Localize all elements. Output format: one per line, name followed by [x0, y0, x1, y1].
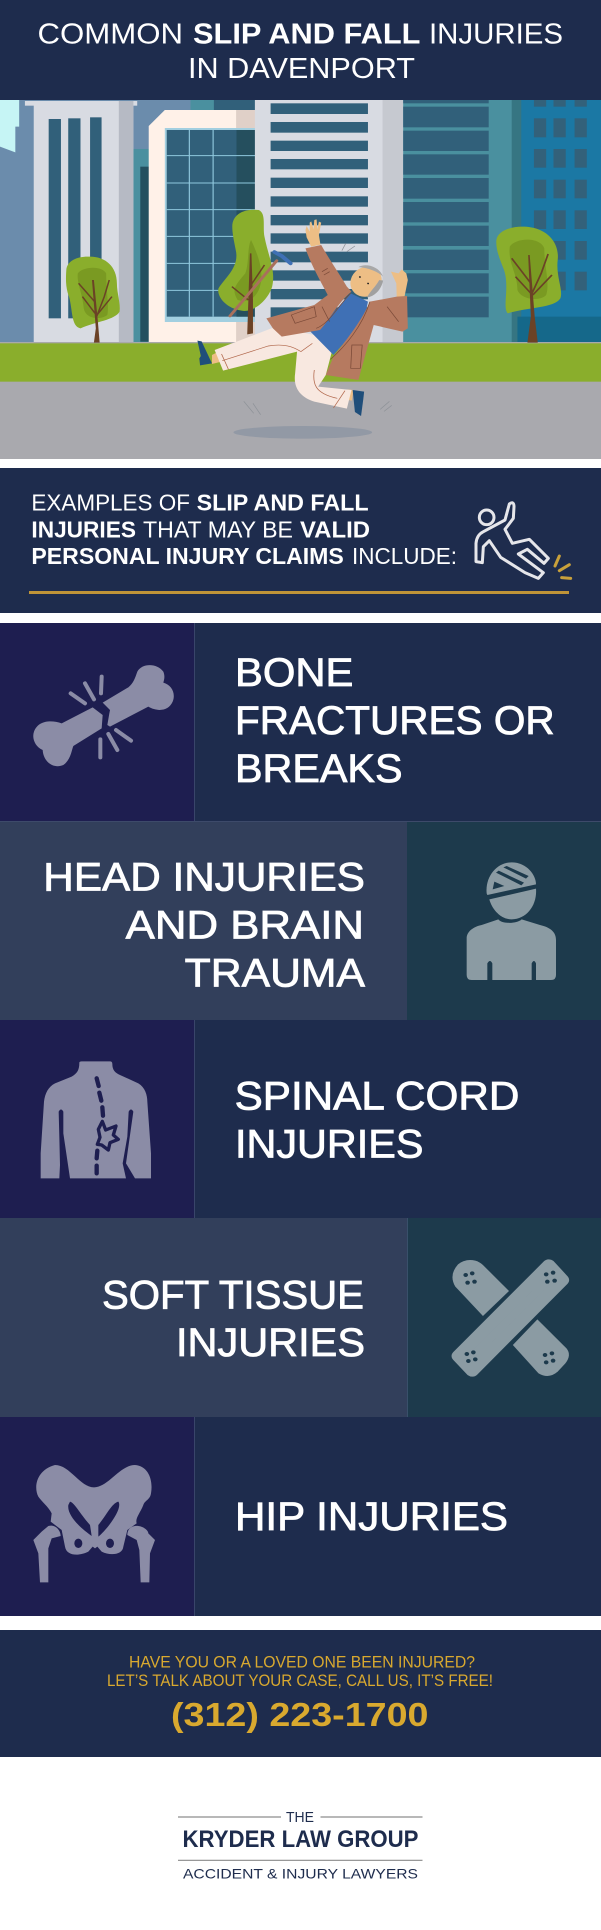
- call to action text: LET’S TALK ABOUT YOUR CASE, CALL US, IT’S FREE!: [107, 1671, 493, 1690]
- phone number: (312) 223-1700: [171, 1697, 428, 1734]
- heading: head injuries and brain trauma: AND BRAIN: [126, 904, 364, 948]
- row: soft tissue: [0, 1218, 601, 1417]
- intro text: SLIP AND FALL: [197, 490, 369, 516]
- icon: person slipping: [476, 503, 571, 578]
- call to action text: [107, 1652, 493, 1690]
- logo: The Kryder Law Group: THE: [286, 1810, 314, 1826]
- heading: soft tissue injuries: [102, 1273, 365, 1365]
- title banner: COMMON: [38, 18, 183, 50]
- call to action panel: [0, 1630, 601, 1757]
- intro text: EXAMPLES OF: [31, 490, 190, 516]
- icon: bandaged head: [467, 862, 556, 980]
- intro text: INCLUDE:: [352, 543, 457, 569]
- heading: soft tissue injuries: SOFT TISSUE: [102, 1273, 364, 1317]
- title banner: IN DAVENPORT: [188, 53, 415, 85]
- heading: bone fractures or breaks: BONE: [235, 651, 353, 695]
- intro text: PERSONAL INJURY CLAIMS: [31, 543, 344, 569]
- heading: bone fractures or breaks: [235, 651, 555, 791]
- heading: bone fractures or breaks: FRACTURES OR: [235, 699, 555, 743]
- call to action text: HAVE YOU OR A LOVED ONE BEEN INJURED?: [129, 1652, 475, 1671]
- logo: The Kryder Law Group: [178, 1810, 422, 1882]
- icon: crossed bandages: [452, 1260, 569, 1376]
- logo: The Kryder Law Group: KRYDER LAW GROUP: [182, 1826, 418, 1853]
- title banner: SLIP AND FALL: [193, 18, 420, 50]
- tree left: [66, 257, 120, 343]
- icon: broken bone: [33, 665, 174, 766]
- intro text: VALID: [300, 517, 370, 543]
- heading: soft tissue injuries: INJURIES: [176, 1321, 365, 1365]
- intro text: [31, 490, 457, 569]
- shadow and motion lines: [233, 243, 392, 439]
- walking cane: [230, 252, 291, 316]
- tree middle: [218, 210, 273, 334]
- icon: pelvis: [33, 1465, 155, 1582]
- intro text: INJURIES: [31, 517, 136, 543]
- logo: The Kryder Law Group: ACCIDENT & INJURY LAWYERS: [183, 1866, 418, 1882]
- title banner: INJURIES: [429, 18, 563, 50]
- row: bone fractures: [0, 623, 601, 821]
- intro panel: [0, 468, 601, 613]
- falling man: [197, 219, 408, 416]
- heading: head injuries and brain trauma: [43, 856, 365, 996]
- heading: bone fractures or breaks: BREAKS: [235, 747, 402, 791]
- intro text: THAT MAY BE: [143, 517, 293, 543]
- row: hip injuries: [0, 1417, 601, 1616]
- title banner: [0, 0, 601, 100]
- row: spinal cord: [0, 1020, 601, 1218]
- illustration: elderly man slipping on city sidewalk: [0, 100, 601, 460]
- heading: spinal cord injuries: INJURIES: [235, 1123, 424, 1167]
- icon: injured spine: [41, 1061, 151, 1178]
- heading: spinal cord injuries: SPINAL CORD: [235, 1074, 519, 1118]
- heading: spinal cord injuries: [235, 1074, 519, 1167]
- tree right: [496, 227, 561, 343]
- heading: head injuries and brain trauma: HEAD INJURIES: [43, 856, 365, 900]
- row: head injuries: [0, 821, 601, 1020]
- heading: hip injuries: HIP INJURIES: [235, 1495, 508, 1539]
- heading: head injuries and brain trauma: TRAUMA: [185, 952, 365, 996]
